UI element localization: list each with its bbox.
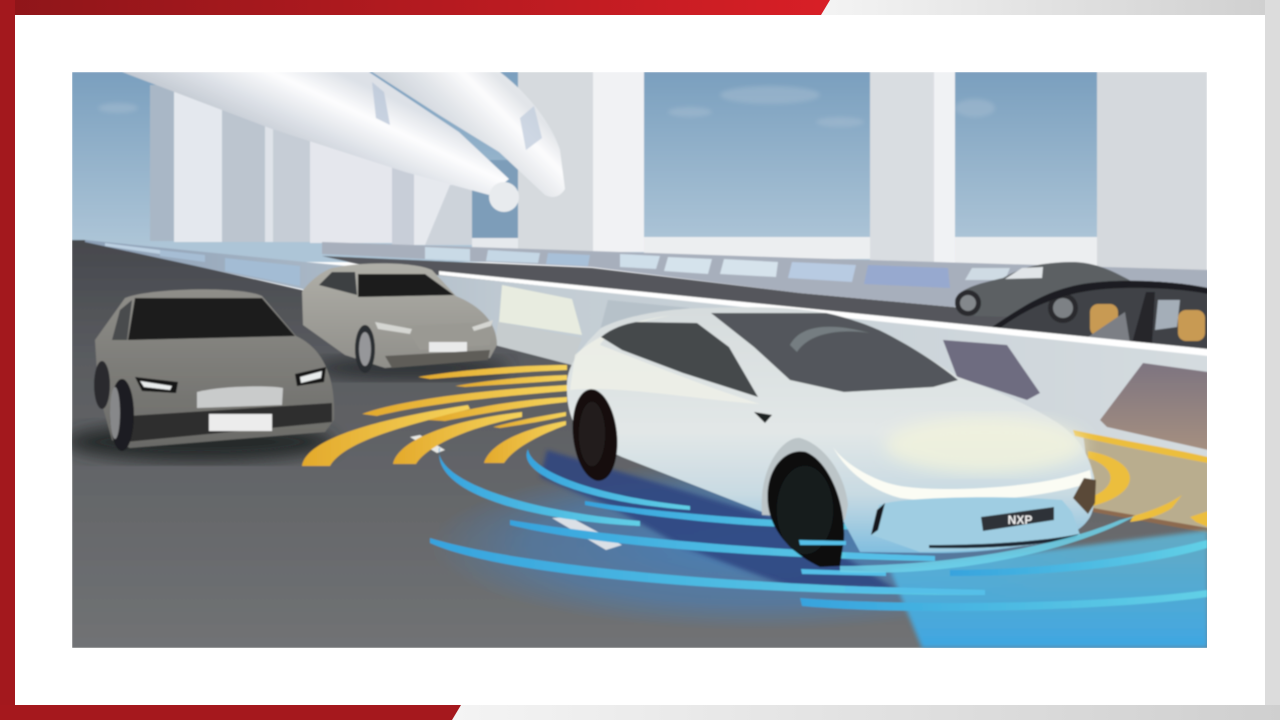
body: [567, 307, 1095, 553]
bridge towers: [150, 72, 1207, 272]
frame: right grey bar: [1265, 0, 1280, 720]
air intake: [871, 503, 885, 535]
near rail windows: [105, 243, 1208, 450]
blue road tint: [449, 470, 1066, 624]
yellow radar arcs, rear: [302, 365, 567, 466]
windscreen reflection: [790, 327, 870, 352]
front pipe: [122, 72, 509, 195]
side windows: [601, 322, 758, 397]
shadow: [310, 356, 510, 380]
near guard rail: [84, 240, 1207, 458]
middle grey sedan: [302, 263, 510, 380]
windscreen: [711, 313, 958, 392]
clouds: [98, 86, 995, 127]
rear pipe: [372, 72, 565, 197]
overhead pipes: [122, 72, 565, 212]
bright blue floor: [890, 530, 1208, 648]
frame: left red bar: [0, 0, 15, 720]
number plate with logo: NXP: [1008, 513, 1032, 527]
kerb band: [1083, 433, 1208, 533]
frame: bottom red bar: [0, 705, 461, 720]
near grey sedan: [65, 289, 335, 462]
bumper face: [872, 497, 1080, 552]
rear wheel: [568, 387, 622, 483]
far guard rail: [322, 242, 1208, 307]
shadow: [65, 422, 335, 462]
car shadow: [540, 450, 897, 590]
hood glow: [885, 417, 1085, 473]
front right lamp: [1073, 478, 1096, 514]
front wheel arch: [762, 438, 848, 520]
side mirror: [754, 412, 772, 423]
rear body highlight: [570, 316, 760, 404]
number plate with logo: [981, 507, 1054, 531]
kerb base: [498, 336, 522, 352]
far rail windows: [425, 247, 1010, 288]
road surface: [72, 240, 1208, 648]
side car with passengers: [992, 281, 1208, 352]
road marking dashes: [552, 517, 622, 550]
hero white car: [567, 307, 1096, 567]
frame: top grey bar: [820, 0, 1280, 15]
frame: top red bar: [0, 0, 830, 15]
photo panel: autonomous car scene: [65, 72, 1208, 648]
guard rail top highlight: [439, 271, 1208, 356]
frame: bottom grey bar: [450, 705, 1280, 720]
far grey sedan: [955, 262, 1133, 318]
lower slit: [929, 534, 1079, 548]
lower blue arc on bumper: [840, 516, 1135, 573]
blue radar arcs: [430, 448, 1207, 611]
lit blade: [833, 447, 1092, 501]
yellow radar arcs, front: [1073, 430, 1208, 527]
dark carriageway band: [323, 255, 1008, 328]
sky: [72, 72, 1207, 262]
pipe end cap: [489, 182, 519, 212]
front wheel: [768, 451, 844, 567]
blue stripes over front wheel: [799, 540, 985, 595]
